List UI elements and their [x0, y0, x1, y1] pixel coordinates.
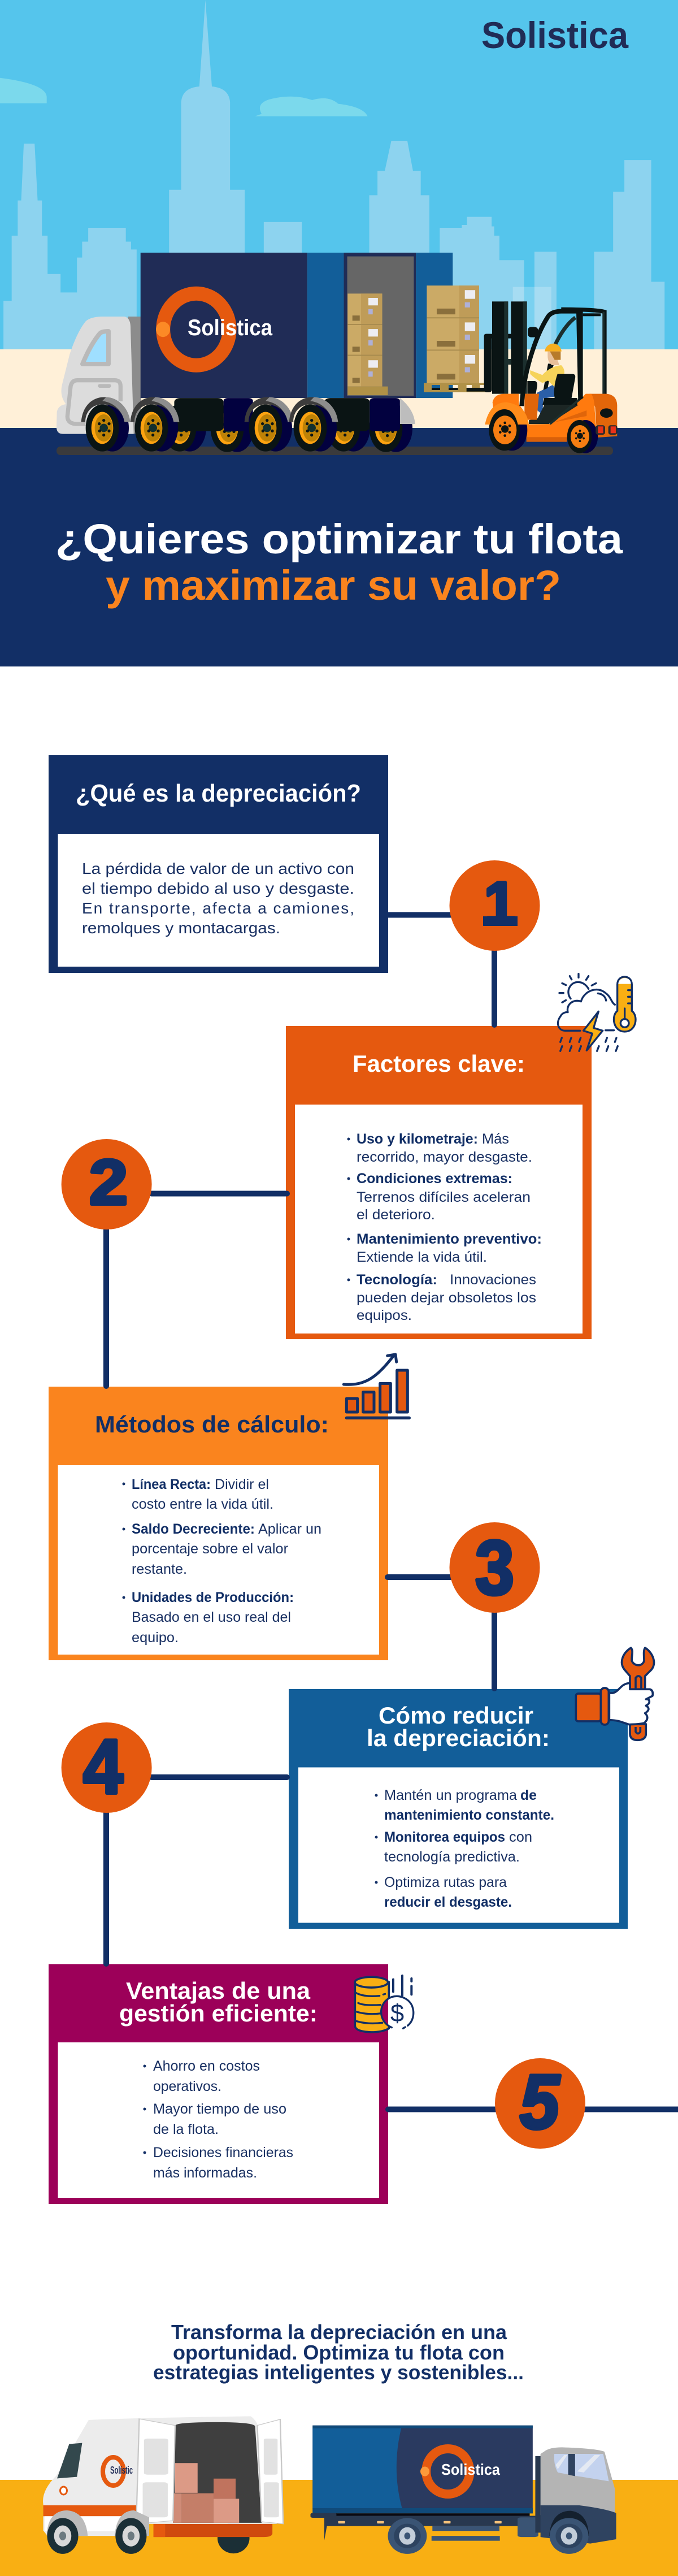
icon: coins and dollar [355, 1976, 415, 2032]
truck logo text: Solistica [441, 2461, 500, 2478]
list: Uso y kilometraje: [357, 1131, 478, 1147]
closing message [153, 2320, 524, 2384]
delivery truck [310, 2426, 616, 2554]
list: Extiende la vida útil. [357, 1249, 487, 1265]
header illustration: city, truck and forklift [0, 0, 678, 666]
list: Unidades de Producción: [132, 1590, 294, 1605]
list: operativos. [153, 2079, 221, 2094]
closing message: estrategias inteligentes y sostenibles... [153, 2361, 524, 2384]
step number 2 [62, 1139, 152, 1229]
list: Mantén un programa [384, 1787, 517, 1803]
heading [367, 1702, 550, 1751]
step number 5: 5 [520, 2059, 560, 2145]
list: Innovaciones [450, 1272, 536, 1288]
list: más informadas. [153, 2165, 257, 2181]
heading [119, 1977, 318, 2027]
icon: rising bar chart [344, 1354, 409, 1418]
list: Optimiza rutas para [384, 1874, 507, 1890]
step number 1 [450, 860, 540, 951]
body text: el tiempo debido al uso y desgaste. [82, 880, 354, 897]
list: Saldo Decreciente: [132, 1521, 255, 1537]
heading: ¿Qué es la depreciación? [76, 780, 361, 807]
step number 3: 3 [475, 1525, 514, 1610]
body text: remolques y montacargas. [82, 919, 280, 937]
panel: cómo reducir la depreciación [289, 1689, 628, 1929]
list: Ahorro en costos [153, 2058, 260, 2074]
operator [530, 344, 564, 414]
step number 4: 4 [83, 1724, 123, 1809]
closing message: oportunidad. Optimiza tu flota con [173, 2341, 505, 2364]
list: Aplicar un [258, 1521, 321, 1537]
connector lines [106, 915, 678, 2112]
list: con [509, 1829, 532, 1845]
list: pueden dejar obsoletos los [357, 1290, 536, 1306]
list: Línea Recta: [132, 1477, 211, 1492]
list: Tecnología: [357, 1272, 437, 1288]
step number 3 [450, 1522, 540, 1613]
heading: Métodos de cálculo: [95, 1411, 329, 1438]
icon: coins and dollar: $ [390, 2000, 404, 2027]
step number 1: 1 [484, 870, 516, 937]
truck logo text: Solistica [188, 315, 273, 340]
list: restante. [132, 1561, 187, 1577]
list [122, 1477, 321, 1646]
main title: ¿Quieres optimizar tu flota [55, 516, 623, 562]
panel: ventajas de una gestión eficiente [49, 1964, 388, 2204]
list: Más [482, 1131, 509, 1147]
list: de la flota. [153, 2122, 219, 2137]
list: porcentaje sobre el valor [132, 1541, 288, 1557]
list: reducir el desgaste. [384, 1894, 512, 1910]
forklift with operator [432, 301, 618, 453]
brand logo: Solistica [481, 14, 629, 56]
heading: Ventajas de una [126, 1977, 311, 2004]
list: Mantenimiento preventivo: [357, 1231, 542, 1247]
closing message: Transforma la depreciación en una [171, 2320, 507, 2344]
heading: Factores clave: [353, 1050, 525, 1077]
truck cab [56, 317, 141, 434]
list: costo entre la vida útil. [132, 1496, 273, 1512]
panel: factores clave [286, 1026, 592, 1339]
heading: la depreciación: [367, 1725, 550, 1751]
step number 5 [495, 2058, 585, 2149]
ground bands [0, 349, 678, 428]
list [375, 1787, 554, 1910]
main title: y maximizar su valor? [106, 562, 561, 609]
step number 4 [62, 1722, 152, 1813]
list [144, 2058, 293, 2181]
main title [55, 516, 623, 609]
truck cargo box [141, 253, 489, 398]
list: Condiciones extremas: [357, 1171, 512, 1187]
panel: métodos de cálculo [49, 1387, 388, 1660]
step number 2: 2 [89, 1147, 128, 1218]
list: Dividir el [215, 1477, 269, 1492]
list: Terrenos difíciles aceleran [357, 1189, 531, 1205]
list: equipos. [357, 1308, 412, 1323]
list: Mayor tiempo de uso [153, 2101, 286, 2117]
delivery van with open doors [43, 2416, 283, 2554]
list: equipo. [132, 1630, 179, 1646]
body text: En transporte, afecta a camiones, [82, 899, 354, 917]
list: Basado en el uso real del [132, 1609, 291, 1625]
list: el deterioro. [357, 1207, 435, 1223]
body text [82, 860, 354, 937]
list: de [520, 1787, 537, 1803]
icon: hand holding wrench [576, 1648, 654, 1740]
city skyline [0, 0, 664, 350]
list: Monitorea equipos [384, 1829, 505, 1845]
list: tecnología predictiva. [384, 1849, 520, 1865]
panel: qué es la depreciación [49, 755, 388, 973]
list: mantenimiento constante. [384, 1807, 554, 1823]
van logo text: Solístic [110, 2465, 133, 2476]
sky background [0, 0, 678, 350]
icon: weather and thermometer [558, 974, 636, 1051]
heading: Cómo reducir [379, 1702, 533, 1729]
truck wheels [81, 397, 415, 452]
list: recorrido, mayor desgaste. [357, 1149, 532, 1165]
list [347, 1131, 542, 1323]
body text: La pérdida de valor de un activo con [82, 860, 354, 877]
list: Decisiones financieras [153, 2145, 293, 2161]
footer band [0, 2480, 678, 2576]
heading: gestión eficiente: [119, 2000, 318, 2027]
